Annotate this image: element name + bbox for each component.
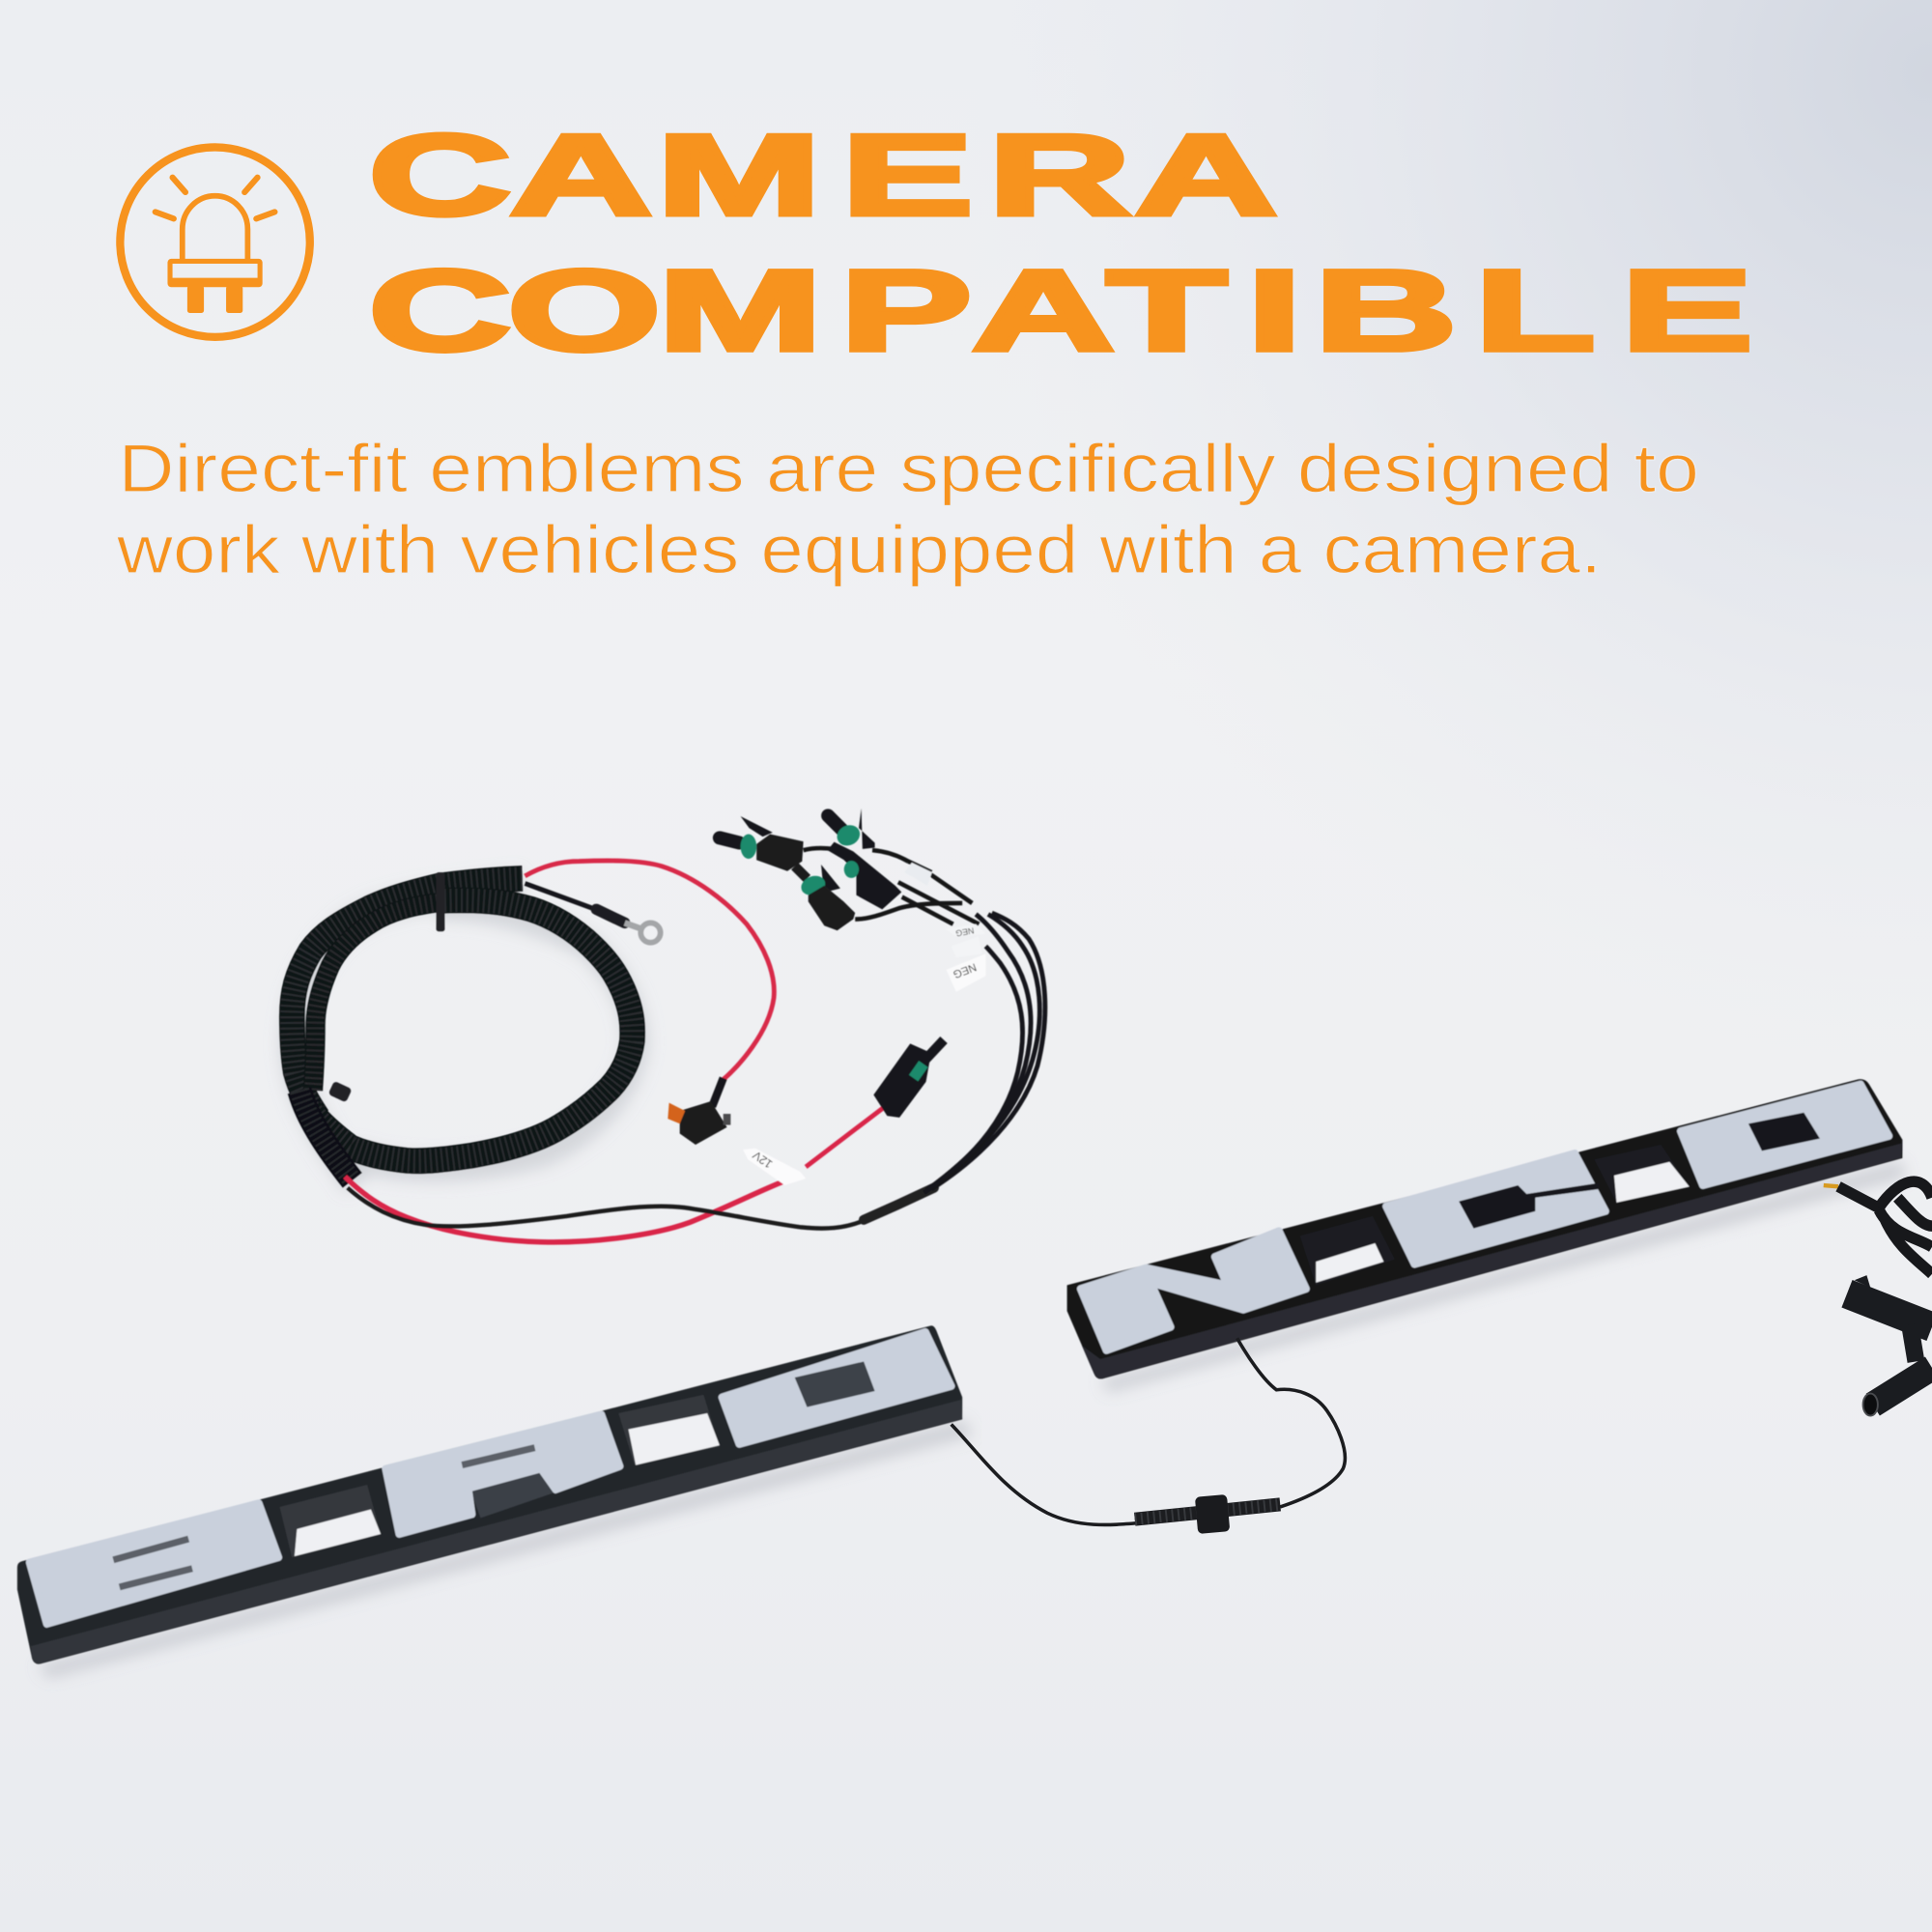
label tags: NEG [952, 960, 978, 980]
label tags: NEG [954, 925, 975, 938]
tube end sleeve [299, 1091, 353, 1180]
connecting cable with waterproof connector [952, 1338, 1345, 1534]
title: CAMERA [369, 111, 1277, 240]
BRO shadow [37, 1419, 974, 1678]
title [369, 111, 1752, 375]
icon: LED bulb in circle [120, 147, 310, 337]
letter O [722, 1332, 952, 1444]
fan-out wires [924, 913, 1045, 1193]
letter O [1681, 1084, 1889, 1185]
harness shadow [294, 885, 636, 1185]
letter B [30, 1503, 278, 1624]
description text [116, 430, 1699, 587]
corrugated tube: main loop [308, 900, 633, 1161]
BRO frame [17, 1325, 962, 1664]
NCO window 2 [1595, 1145, 1690, 1203]
NCO shadow [1100, 1161, 1907, 1392]
emblem: BRO [17, 1325, 974, 1678]
BRO window 1 [280, 1485, 381, 1557]
letter R [385, 1414, 620, 1534]
corrugated tube: outer loop [292, 878, 523, 1118]
connector A [720, 816, 804, 871]
BRO window 2 [618, 1395, 720, 1465]
connector C [795, 865, 855, 930]
NCO frame [1067, 1079, 1902, 1379]
NCO window 1 [1300, 1216, 1395, 1285]
corrugated tube: inner strand [313, 902, 443, 1091]
letter C [1386, 1153, 1605, 1264]
fuse tap [668, 1078, 730, 1145]
letter N [1081, 1231, 1306, 1350]
emblem: NCO [1067, 1079, 1907, 1392]
title: COMPATIBLE [369, 247, 1752, 375]
heat shrink [864, 1188, 934, 1220]
connector wires [804, 848, 979, 924]
right-edge loom and connectors [1824, 1181, 1932, 1416]
ground wire and ring terminal [525, 884, 661, 943]
tag: 12V [743, 1148, 806, 1185]
label tags [904, 863, 985, 992]
lower red wire [345, 1177, 786, 1242]
wiring harness [292, 809, 1045, 1242]
zip ties [328, 872, 444, 1102]
tag: 12V: 12V [750, 1148, 775, 1171]
lower black wire [348, 1188, 863, 1229]
top connectors [720, 809, 979, 930]
connector B [828, 809, 901, 909]
red wire to fuse tap [525, 861, 774, 1081]
description text: Direct-fit emblems are specifically designed to [118, 430, 1699, 506]
description text: work with vehicles equipped with a camera. [116, 511, 1602, 587]
lower connector [873, 1040, 944, 1118]
